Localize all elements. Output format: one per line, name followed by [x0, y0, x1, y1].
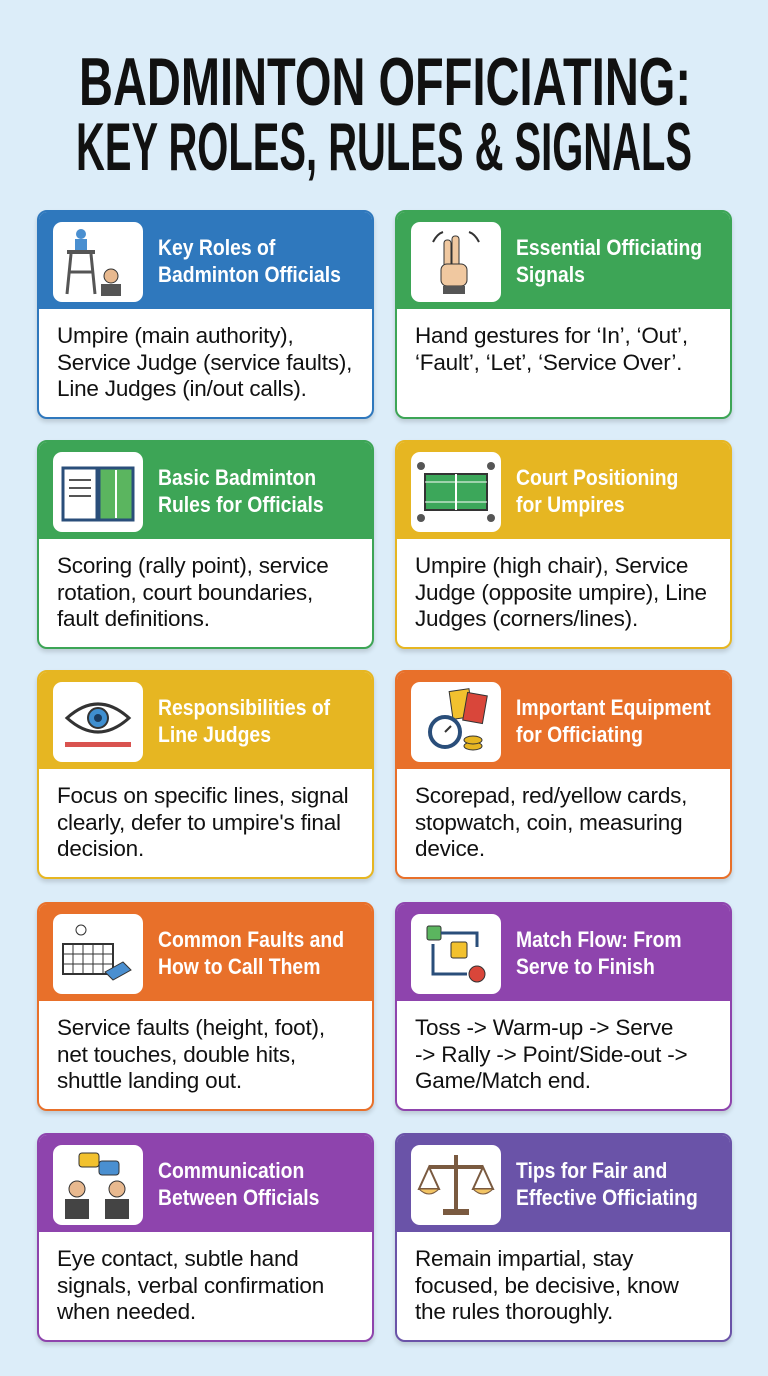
panel: signals	[395, 210, 732, 419]
panel: equipment: Scorepad, red/yellow cards,	[415, 783, 687, 808]
panel: tips: Remain impartial, stay	[415, 1246, 633, 1271]
panel: match flow: Serve to Finish	[516, 954, 655, 979]
panel: faults	[37, 902, 374, 1111]
panel: equipment: for Officiating	[516, 722, 643, 747]
icon: equipment	[411, 682, 501, 762]
panel: court positioning: Judges (corners/lines).	[415, 606, 638, 631]
panel: key roles	[37, 210, 374, 419]
panel: court positioning: for Umpires	[516, 492, 625, 517]
panel: key roles: Umpire (main authority),	[57, 323, 294, 348]
panel: key roles: Line Judges (in/out calls).	[57, 376, 307, 401]
panel: rules: Scoring (rally point), service	[57, 553, 329, 578]
panel: faults: net touches, double hits,	[57, 1042, 296, 1066]
panel: rules: Basic Badminton	[158, 465, 316, 490]
panel: tips: focused, be decisive, know	[415, 1272, 679, 1298]
panel: faults: Service faults (height, foot),	[57, 1015, 325, 1040]
panel: equipment	[395, 670, 732, 879]
panel: line judges: clearly, defer to umpire's final	[57, 810, 341, 834]
panel: tips	[395, 1133, 732, 1342]
panel: rules: Rules for Officials	[158, 492, 324, 517]
panel: match flow: Game/Match end.	[415, 1068, 591, 1093]
panel: key roles: Service Judge (service faults),	[57, 350, 352, 374]
panel: signals: Signals	[516, 262, 585, 287]
icon: umpire chair	[53, 222, 143, 302]
panel: match flow: Toss -> Warm-up -> Serve	[415, 1015, 673, 1040]
panel: faults: Common Faults and	[158, 927, 344, 952]
panel: signals: Hand gestures for ‘In’, ‘Out’,	[415, 323, 688, 348]
panel: match flow: -> Rally -> Point/Side-out ->	[415, 1042, 687, 1066]
panel: tips: Effective Officiating	[516, 1185, 698, 1210]
icon: court	[411, 452, 501, 532]
panel: line judges: Focus on specific lines, signal	[57, 783, 348, 808]
panel: court positioning: Umpire (high chair), Service	[415, 553, 688, 578]
panel: faults: How to Call Them	[158, 954, 320, 979]
panel: signals: ‘Fault’, ‘Let’, ‘Service Over’.	[415, 350, 682, 374]
panel: communication: when needed.	[57, 1299, 196, 1324]
panel: key roles: Badminton Officials	[158, 262, 341, 287]
icon: hand	[411, 222, 501, 302]
panel: tips: the rules thoroughly.	[415, 1299, 613, 1324]
icon: scales	[411, 1145, 501, 1225]
panel: communication: Between Officials	[158, 1185, 319, 1210]
panel: communication: Eye contact, subtle hand	[57, 1246, 299, 1271]
panel: court positioning: Judge (opposite umpire), Line	[415, 580, 707, 604]
panel: faults: shuttle landing out.	[57, 1068, 242, 1093]
panel: equipment: Important Equipment	[516, 695, 711, 720]
panel: line judges: Responsibilities of	[158, 695, 330, 720]
panel: communication: Communication	[158, 1158, 304, 1183]
panel: rules: fault definitions.	[57, 606, 210, 631]
panel: court positioning	[395, 440, 732, 649]
panel: rules	[37, 440, 374, 649]
panel: equipment: stopwatch, coin, measuring	[415, 810, 682, 834]
panel: communication	[37, 1133, 374, 1342]
panel: signals: Essential Officiating	[516, 235, 702, 260]
panel: tips: Tips for Fair and	[516, 1158, 667, 1183]
panel: match flow	[395, 902, 732, 1111]
icon: eye	[53, 682, 143, 762]
icon: flow	[411, 914, 501, 994]
panel: communication: signals, verbal confirmation	[57, 1272, 324, 1298]
panel: line judges: decision.	[57, 836, 144, 861]
panel: match flow: Match Flow: From	[516, 927, 682, 952]
icon: net and foot	[53, 914, 143, 994]
panel: line judges	[37, 670, 374, 879]
panel: court positioning: Court Positioning	[516, 465, 678, 490]
icon: rule book	[53, 452, 143, 532]
panel: equipment: device.	[415, 836, 485, 861]
panel: key roles: Key Roles of	[158, 235, 275, 260]
panel: rules: rotation, court boundaries,	[57, 580, 313, 604]
panel: line judges: Line Judges	[158, 722, 271, 747]
title	[76, 44, 692, 185]
icon: two officials talking	[53, 1145, 143, 1225]
